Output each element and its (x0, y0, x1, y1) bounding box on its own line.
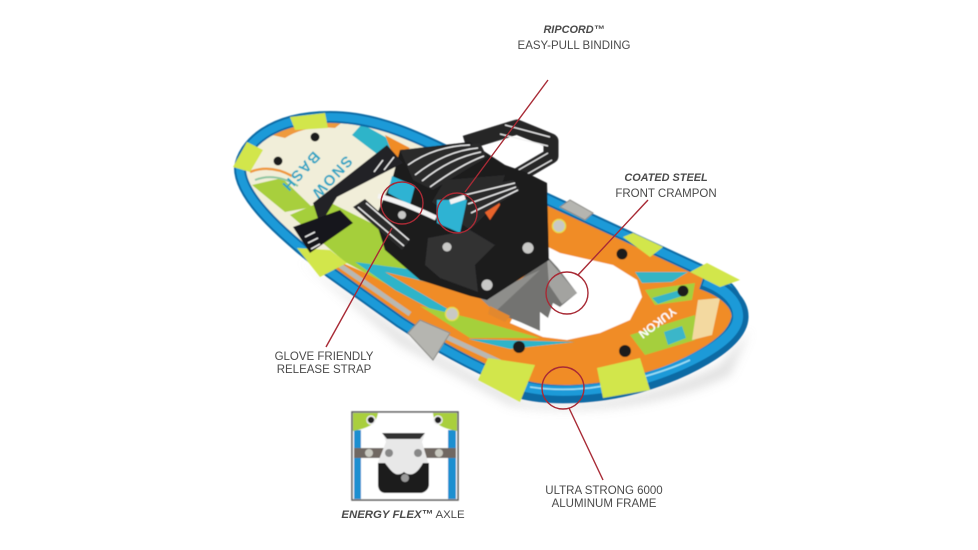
ripcord callout leader (465, 80, 548, 192)
deck graphics: SNOW BASH and YUKON: SNOW (307, 152, 356, 202)
deck graphics: SNOW BASH and YUKON: YUKON (636, 304, 679, 341)
deck cut-out (510, 247, 642, 340)
snowshoe product (230, 105, 750, 410)
metal clips (408, 200, 593, 360)
aluminum frame (240, 117, 740, 395)
deck (245, 122, 732, 386)
deck graphics: SNOW BASH and YUKON (278, 148, 679, 341)
label: aluminum frame: ULTRA STRONG 6000 (545, 485, 663, 497)
inset caption: ENERGY FLEX™ AXLE (341, 509, 465, 521)
inset plate (378, 433, 428, 493)
label: glove friendly strap: GLOVE FRIENDLY (275, 351, 374, 363)
inset hinge bars (354, 448, 456, 458)
yellow-green tape bands (233, 113, 740, 402)
teal ripcord housing (437, 200, 467, 233)
red callout circles and leader lines (326, 80, 648, 480)
label: aluminum frame: ALUMINUM FRAME (552, 498, 657, 510)
label: coated steel crampon: FRONT CRAMPON (615, 188, 717, 200)
ripcord circle (437, 193, 477, 233)
deck graphics: SNOW BASH and YUKON: BASH (278, 148, 323, 195)
grey frame edge strip (335, 262, 500, 362)
label: glove friendly strap: RELEASE STRAP (277, 364, 372, 376)
steel crampon (490, 256, 577, 331)
binding plate and rear mass (375, 142, 549, 300)
crampon circle (546, 272, 588, 314)
white release cord (378, 196, 465, 218)
inset green corners (353, 413, 457, 431)
label: ripcord binding: RIPCORD™ (543, 24, 605, 36)
label: ripcord binding: EASY-PULL BINDING (518, 40, 631, 52)
label: coated steel crampon: COATED STEEL (624, 172, 708, 184)
wide webbing strap (313, 145, 403, 225)
binding bolts (398, 211, 534, 290)
ground shadow (300, 260, 750, 410)
rivets (274, 132, 688, 357)
buckle (293, 210, 353, 253)
inset rails (354, 430, 456, 499)
glove strap leader (326, 228, 392, 347)
crampon leader (578, 200, 648, 275)
frame circle (542, 367, 584, 409)
frame leader (569, 408, 603, 480)
ladder straps (353, 143, 520, 250)
inset: energy flex axle (352, 412, 458, 500)
rear strap loop (465, 125, 552, 177)
glove strap circle (381, 182, 423, 224)
